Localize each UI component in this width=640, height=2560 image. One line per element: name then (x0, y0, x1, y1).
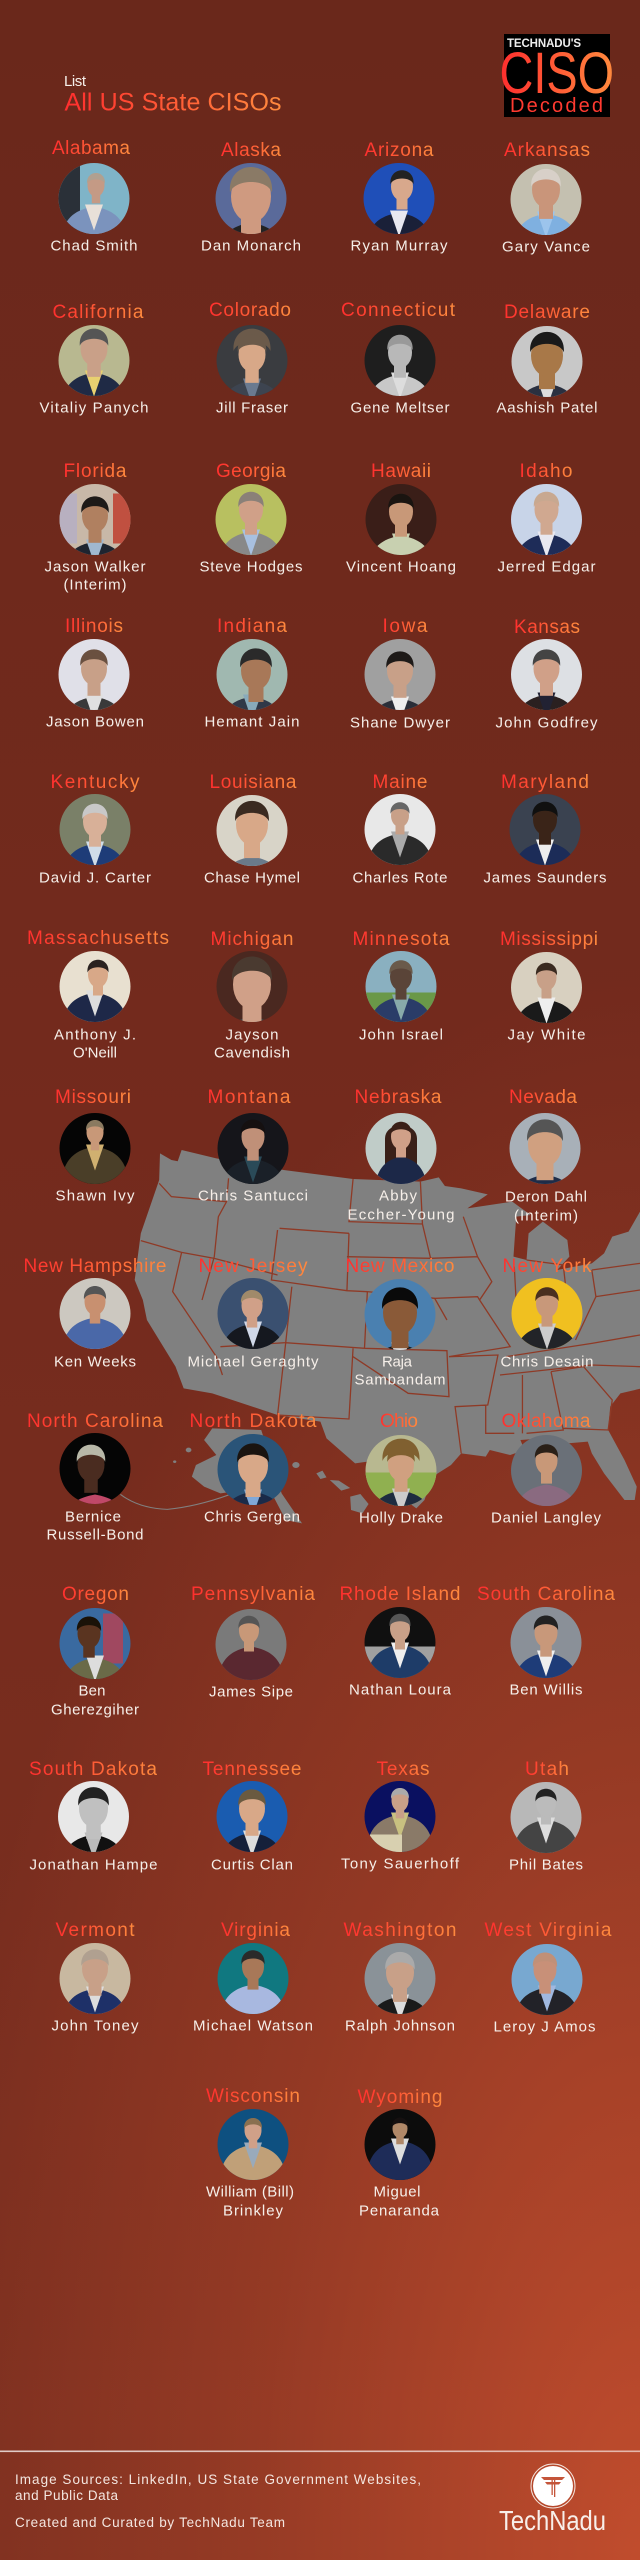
panel: Wisconsin (206, 2086, 300, 2220)
title: All US State CISOs (64, 88, 282, 116)
name: John Toney (52, 2018, 139, 2034)
name: Cavendish (214, 1044, 290, 1062)
portrait (511, 639, 582, 710)
state name: Kentucky (50, 772, 140, 793)
name: Gherezgiher (51, 1702, 139, 1718)
panel: Alaska (202, 142, 300, 250)
portrait (511, 1278, 583, 1370)
portrait (216, 1780, 288, 1876)
name: (Interim) (64, 576, 126, 594)
state name: Hawaii (371, 461, 431, 482)
name: Vitaliy Panych (40, 400, 148, 416)
state name: Montana (208, 1087, 291, 1108)
portrait (510, 1434, 582, 1528)
panel: Mississippi (500, 929, 598, 1044)
state name: Pennsylvania (191, 1584, 315, 1605)
state name: Alabama (52, 138, 130, 159)
name: Shawn Ivy (56, 1188, 135, 1204)
panel: Minnesota (352, 929, 450, 1044)
name: Charles Rote (352, 870, 448, 886)
name: William (Bill) (206, 2184, 294, 2200)
panel: Arkansas (502, 140, 590, 258)
portrait (511, 1944, 583, 2032)
name: Penaranda (359, 2202, 440, 2220)
portrait (59, 1112, 131, 1190)
name: James Saunders (484, 870, 606, 886)
name: Dan Monarch (201, 238, 301, 254)
name: Raja (382, 1354, 413, 1370)
state name: West Virginia (484, 1920, 612, 1941)
panel: Delaware (496, 304, 596, 412)
portrait (215, 1608, 287, 1690)
name: Chris Santucci (198, 1188, 308, 1204)
panel: Massachusetts (27, 928, 169, 1062)
portrait (364, 163, 434, 234)
state name: Ohio (380, 1411, 418, 1432)
state name: Wyoming (358, 2087, 442, 2108)
panel: Hawaii (346, 461, 456, 580)
name: Nathan Loura (349, 1682, 452, 1698)
state name: Kansas (514, 617, 580, 638)
portrait (364, 639, 436, 710)
portrait (366, 484, 436, 555)
name: John Godfrey (496, 714, 598, 732)
panel: Virginia (193, 1920, 313, 2034)
logo: CISO Decoded badge (500, 34, 614, 117)
state name: Virginia (221, 1920, 290, 1941)
portrait (217, 2108, 289, 2188)
name (505, 1188, 587, 1224)
logo: CISO Decoded badge: Decoded (510, 95, 603, 117)
name: Gary Vance (502, 238, 590, 256)
panel: Vermont (52, 1920, 139, 2034)
map: United States silhouette (135, 1150, 640, 1508)
portrait (216, 950, 288, 1060)
name: Jonathan Hampe (30, 1856, 158, 1874)
panel: Michigan (210, 929, 294, 1062)
panel: South Carolina (477, 1584, 615, 1698)
portrait (58, 163, 130, 234)
panel: New Hampshire (24, 1256, 166, 1370)
portrait (216, 639, 288, 710)
state name: Maine (372, 772, 428, 793)
portrait (58, 1780, 130, 1878)
panel: Illinois (46, 618, 143, 726)
footer: sources and credits: and Public Data (15, 2488, 118, 2503)
name (348, 1188, 454, 1224)
name (46, 1508, 144, 1544)
state name: New Mexico (346, 1256, 454, 1277)
portrait (216, 484, 286, 555)
name (354, 1354, 446, 1388)
panel: Alabama (50, 138, 138, 254)
panel: Louisiana (204, 774, 299, 886)
name (51, 1682, 139, 1718)
panel: Rhode Island (340, 1584, 460, 1698)
state name: Arizona (364, 140, 434, 161)
panel: Nebraska (348, 1087, 454, 1224)
portrait (58, 325, 130, 396)
panel: Maryland (484, 772, 606, 886)
portrait (510, 952, 582, 1044)
panel: Indiana (206, 618, 298, 726)
state name: Mississippi (500, 929, 598, 950)
name: Curtis Clan (211, 1856, 293, 1874)
state name: New Hampshire (24, 1256, 166, 1277)
portrait (512, 326, 582, 397)
panel: Missouri (55, 1087, 135, 1204)
name (54, 1026, 136, 1062)
footer: sources and credits: Created and Curated by TechNadu Team (15, 2515, 285, 2530)
portrait (217, 1942, 289, 2028)
name: (Interim) (514, 1208, 578, 1224)
panel: Ohio (359, 1411, 443, 1534)
portrait (510, 1606, 582, 1696)
name: Jerred Edgar (498, 558, 596, 576)
panel: Florida (44, 461, 146, 594)
name: Hemant Jain (204, 714, 300, 730)
state name: Connecticut (341, 300, 456, 321)
portrait (364, 794, 436, 865)
panel: Washington (344, 1920, 456, 2040)
portrait (364, 2108, 436, 2184)
panel: Georgia (200, 461, 302, 576)
footer: sources and credits: Image Sources: LinkedIn, US State Government Websites, (15, 2472, 421, 2487)
panel: Wyoming (358, 2087, 442, 2220)
panel: Tennessee (202, 1759, 302, 1876)
name: Chris Desain (500, 1354, 594, 1370)
panel: South Dakota (29, 1759, 158, 1878)
state name: Colorado (209, 300, 291, 321)
state name: Indiana (217, 616, 287, 637)
name: John Israel (359, 1026, 443, 1044)
name: Sambandam (354, 1372, 446, 1388)
state name: Idaho (520, 461, 572, 482)
portrait (58, 639, 130, 710)
footer: sources and credits (15, 2472, 421, 2530)
panel: Arizona (350, 140, 448, 256)
name (214, 1026, 290, 1062)
logo: TechNadu: TechNadu (499, 2505, 606, 2536)
portrait (59, 1278, 131, 1362)
name: Jill Fraser (216, 400, 288, 416)
heading: list label: List (64, 73, 87, 90)
panel: Kansas (496, 617, 598, 738)
name: Daniel Langley (491, 1510, 602, 1526)
panel: Iowa (350, 618, 450, 730)
logo: TechNadu (499, 2464, 606, 2536)
name: Jason Walker (44, 558, 146, 576)
state name: Iowa (382, 616, 428, 637)
portrait (59, 1432, 131, 1538)
name: Miguel (374, 2184, 420, 2200)
name: Chris Gergen (204, 1508, 300, 1526)
name: Michael Geraghty (188, 1354, 319, 1370)
name: Ryan Murray (350, 238, 448, 254)
name: Ben (78, 1682, 106, 1700)
name: Ken Weeks (54, 1354, 136, 1370)
panel: Oregon (51, 1584, 139, 1718)
name: Bernice (65, 1508, 121, 1526)
logo: CISO Decoded badge: CISO (500, 41, 614, 106)
name: Anthony J. (54, 1026, 136, 1044)
state name: Arkansas (504, 140, 590, 161)
name: Leroy J Amos (494, 2018, 596, 2036)
name: Aashish Patel (496, 400, 598, 416)
state name: Vermont (56, 1920, 135, 1941)
portrait (59, 1942, 131, 2032)
state name: Missouri (55, 1087, 131, 1108)
state name: North Carolina (27, 1411, 163, 1432)
name: O'Neill (73, 1044, 117, 1062)
panel: New York (500, 1256, 594, 1370)
panel: Kentucky (39, 772, 151, 888)
state name: Georgia (216, 461, 286, 482)
state name: New Jersey (198, 1256, 308, 1277)
name: Phil Bates (509, 1856, 583, 1874)
panel: Utah (509, 1759, 583, 1874)
state name: Oklahoma (502, 1411, 591, 1432)
name: Holly Drake (359, 1510, 443, 1526)
state name: Florida (64, 461, 127, 482)
name: David J. Carter (39, 870, 151, 886)
panel: Connecticut (341, 300, 456, 418)
panel: New Mexico (346, 1256, 454, 1388)
portrait (217, 1434, 289, 1536)
portrait (364, 1606, 436, 1688)
name (206, 2184, 294, 2220)
state name: Delaware (504, 302, 590, 323)
name: Tony Sauerhoff (341, 1856, 460, 1872)
state name: Minnesota (352, 929, 450, 950)
panel: Montana (198, 1087, 308, 1204)
portrait (510, 794, 580, 865)
portrait (510, 1782, 582, 1864)
name: Brinkley (223, 2202, 284, 2220)
panel: Pennsylvania (191, 1584, 315, 1700)
panel: New Jersey (188, 1256, 319, 1370)
state name: Wisconsin (206, 2086, 300, 2107)
portrait (510, 164, 582, 235)
panel: North Dakota (190, 1411, 317, 1536)
state name: Alaska (221, 140, 281, 161)
portrait (364, 1780, 436, 1858)
map: Alaska and Hawaii (120, 1428, 369, 1523)
name: Gene Meltser (350, 400, 450, 416)
portrait (216, 325, 288, 396)
logo: CISO Decoded badge: TECHNADU'S (507, 38, 581, 50)
name: Steve Hodges (200, 558, 302, 576)
portrait (511, 484, 582, 555)
portrait (216, 163, 286, 234)
state name: New York (502, 1256, 592, 1277)
portrait (365, 1434, 437, 1534)
name: Jason Bowen (46, 714, 144, 730)
state name: Nebraska (354, 1087, 442, 1108)
name: Vincent Hoang (346, 558, 456, 576)
state name: Louisiana (210, 772, 297, 793)
name: Shane Dwyer (350, 714, 450, 732)
portrait (59, 1608, 131, 1702)
name: Abby (379, 1188, 418, 1204)
state name: South Carolina (477, 1584, 615, 1605)
state name: Rhode Island (340, 1584, 460, 1605)
portrait (60, 484, 130, 555)
portrait (217, 1112, 289, 1202)
name: Russell-Bond (46, 1526, 144, 1544)
state name: Maryland (501, 772, 589, 793)
portrait (364, 325, 436, 396)
portrait (365, 1112, 437, 1200)
panel: Oklahoma (491, 1411, 602, 1528)
name: Michael Watson (193, 2018, 313, 2034)
state name: Illinois (65, 616, 123, 637)
panel: Idaho (498, 461, 596, 578)
name: James Sipe (209, 1684, 293, 1700)
state name: California (52, 302, 144, 323)
state name: Utah (525, 1759, 569, 1780)
name: Chase Hymel (204, 870, 300, 886)
state name: Oregon (62, 1584, 129, 1605)
name: Chad Smith (50, 238, 138, 254)
state name: South Dakota (29, 1759, 157, 1780)
name (44, 558, 146, 594)
state name: Tennessee (202, 1759, 302, 1780)
name: Ralph Johnson (345, 2018, 455, 2034)
panel: West Virginia (484, 1920, 612, 2036)
panel: North Carolina (27, 1411, 163, 1544)
portrait (364, 1942, 436, 2040)
state name: Michigan (210, 929, 294, 950)
portrait (59, 950, 131, 1036)
portrait (216, 795, 288, 866)
name: Deron Dahl (505, 1188, 587, 1206)
state name: Nevada (509, 1087, 577, 1108)
panel: California (40, 302, 148, 416)
panel: Nevada (505, 1087, 587, 1224)
state name: Massachusetts (27, 928, 169, 949)
panel: Texas (341, 1759, 460, 1872)
name: Jay White (508, 1026, 586, 1044)
portrait (364, 1278, 436, 1388)
portrait (509, 1112, 581, 1218)
panel: Colorado (210, 302, 290, 412)
name: Jayson (226, 1026, 278, 1044)
name: Eccher-Young (348, 1206, 454, 1224)
state name: North Dakota (190, 1411, 317, 1432)
panel: Maine (352, 772, 448, 886)
portrait (217, 1278, 289, 1368)
state name: Washington (344, 1920, 456, 1941)
portrait (365, 950, 437, 1040)
state name: Texas (376, 1759, 430, 1780)
name: Ben Willis (510, 1682, 582, 1698)
name (359, 2184, 440, 2220)
portrait (60, 794, 130, 865)
